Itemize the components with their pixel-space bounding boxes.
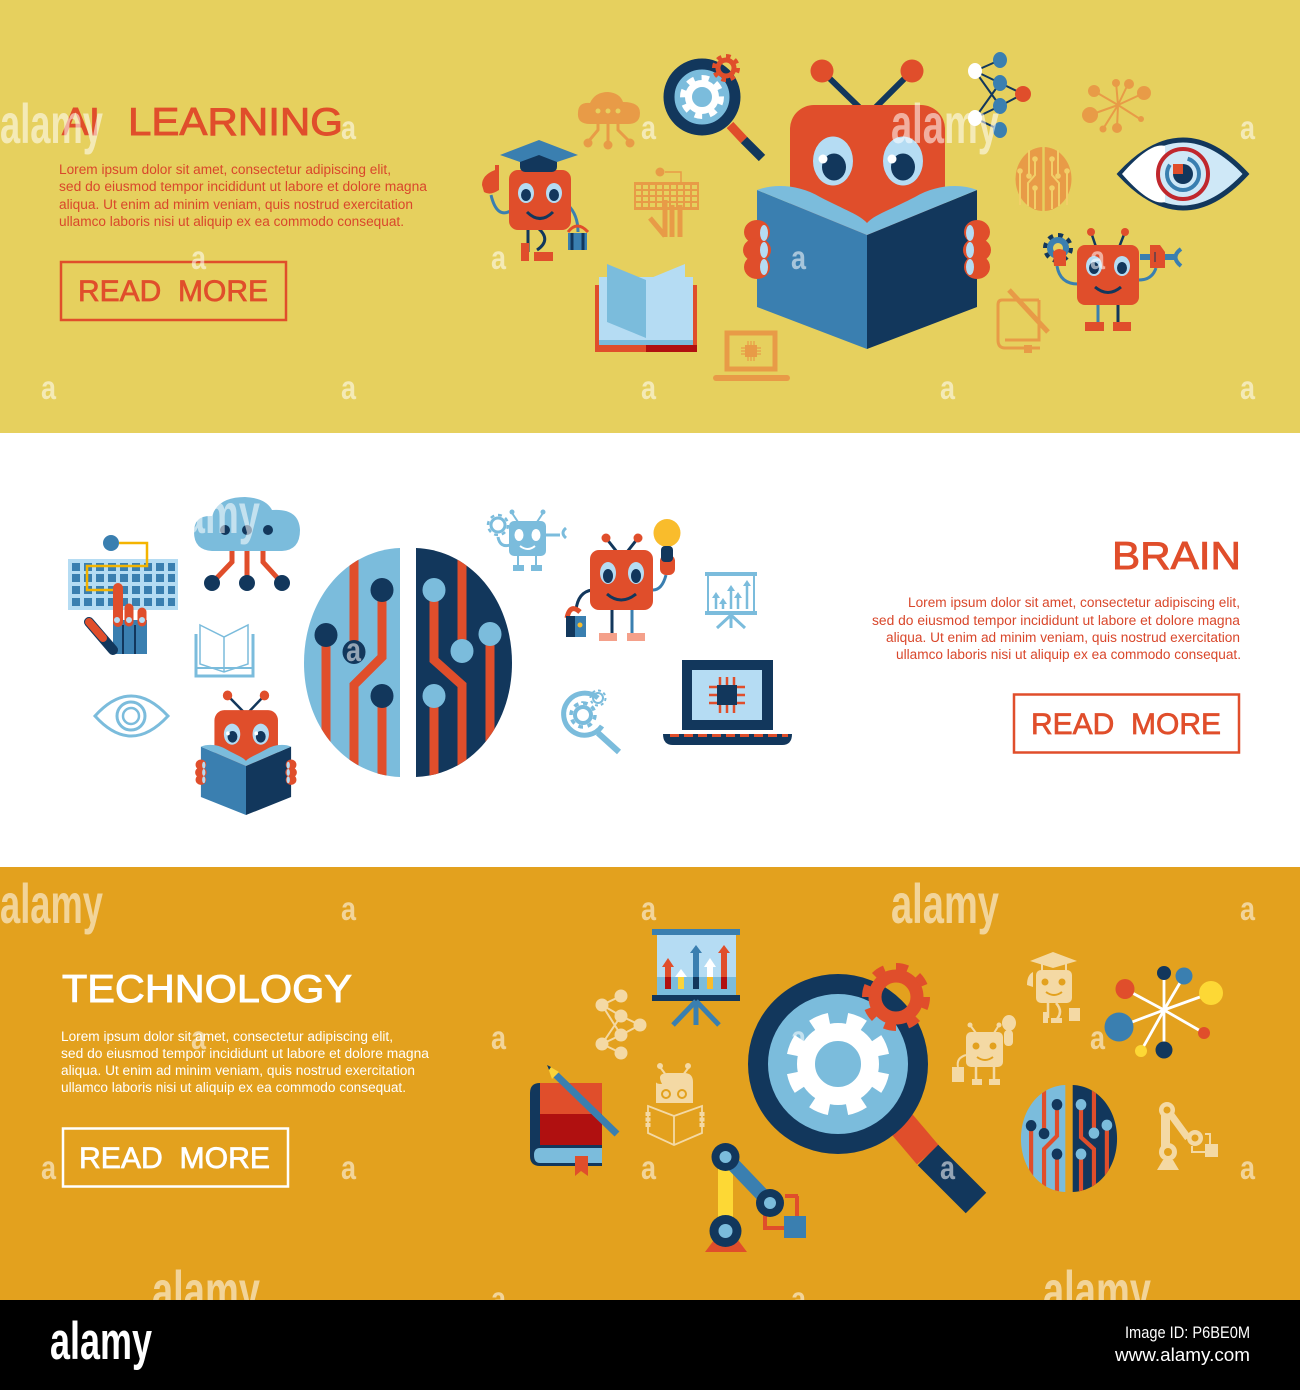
watermarks: a bbox=[940, 1149, 956, 1186]
watermarks: a bbox=[791, 1019, 807, 1056]
watermarks: a bbox=[41, 369, 57, 406]
icon: reading robot bbox=[743, 60, 991, 349]
watermarks: alamy bbox=[0, 872, 103, 935]
text block: AI learning description: ullamco laboris nisi ut aliquip ex ea commodo consequat. bbox=[59, 214, 404, 229]
watermarks: a bbox=[791, 1280, 807, 1317]
text block: technology description: Lorem ipsum dolor sit amet, consectetur adipiscing elit, bbox=[61, 1029, 393, 1044]
text block: technology description bbox=[61, 1029, 429, 1095]
icon: eye outline bbox=[95, 696, 168, 736]
text block: AI learning description: Lorem ipsum dolor sit amet, consectetur adipiscing elit, bbox=[59, 162, 391, 177]
button: read more bbox=[1014, 694, 1239, 752]
watermarks: a bbox=[191, 239, 207, 276]
text block: technology description: sed do eiusmod tempor incididunt ut labore et dolore magna bbox=[61, 1046, 429, 1061]
icon: big magnifier with gear bbox=[758, 967, 976, 1203]
text block: technology description: aliqua. Ut enim ad minim veniam, quis nostrud exercitation bbox=[61, 1063, 415, 1078]
text block: brain description: Lorem ipsum dolor sit amet, consectetur adipiscing elit, bbox=[908, 595, 1240, 610]
text block: brain description: aliqua. Ut enim ad minim veniam, quis nostrud exercitation bbox=[886, 630, 1240, 645]
icon: magnifier outline bbox=[564, 690, 619, 752]
watermarks: a bbox=[1240, 109, 1256, 146]
watermarks: a bbox=[641, 369, 657, 406]
icon: faded cloud bbox=[578, 92, 640, 150]
icon: faded robot arm bbox=[1157, 1102, 1218, 1170]
chart: presentation board bbox=[652, 929, 740, 1025]
icon: cloud network bbox=[194, 497, 300, 591]
watermarks: alamy bbox=[1043, 1259, 1151, 1322]
footer url: www.alamy.com bbox=[1114, 1345, 1250, 1365]
icon: eye bbox=[1120, 140, 1246, 208]
watermarks: alamy bbox=[152, 1259, 260, 1322]
heading: Technology: TECHNOLOGY bbox=[62, 968, 352, 1011]
icon: robot with light bulb bbox=[566, 519, 680, 641]
watermarks: alamy bbox=[152, 482, 260, 545]
footer bar bbox=[0, 1300, 1300, 1390]
watermarks: a bbox=[41, 1149, 57, 1186]
watermarks: alamy bbox=[891, 92, 999, 155]
icon: faded graduate robot bbox=[1027, 952, 1080, 1023]
button: read more bbox=[63, 1128, 288, 1186]
icon: faded laptop bbox=[713, 333, 790, 381]
icon: graduate robot bbox=[482, 140, 588, 261]
icon: mechanic robot bbox=[1045, 228, 1181, 331]
watermarks: a bbox=[1240, 369, 1256, 406]
watermarks: a bbox=[346, 631, 362, 668]
text block: technology description: ullamco laboris nisi ut aliquip ex ea commodo consequat. bbox=[61, 1080, 406, 1095]
watermarks: a bbox=[791, 239, 807, 276]
watermarks: a bbox=[491, 1280, 507, 1317]
watermarks: alamy bbox=[891, 872, 999, 935]
text block: brain description: sed do eiusmod tempor incididunt ut labore et dolore magna bbox=[872, 613, 1240, 628]
button: read more bbox=[61, 262, 286, 320]
icon: robot arm bbox=[705, 1143, 806, 1252]
icon: open book bbox=[595, 264, 697, 352]
panel: brain bbox=[0, 433, 1300, 867]
watermarks: a bbox=[1240, 1149, 1256, 1186]
text block: brain description: ullamco laboris nisi ut aliquip ex ea commodo consequat. bbox=[896, 647, 1241, 662]
watermarks: a bbox=[1240, 890, 1256, 927]
footer image id: Image ID: P6BE0M bbox=[1125, 1324, 1250, 1342]
icon: keyboard and hand bbox=[68, 535, 178, 654]
icon: magnifier with gear bbox=[669, 56, 762, 158]
icon: faded notebook bbox=[998, 290, 1048, 353]
watermarks: a bbox=[341, 369, 357, 406]
button: read more: READ MORE bbox=[79, 1142, 270, 1175]
watermarks: a bbox=[491, 1019, 507, 1056]
watermarks: a bbox=[641, 890, 657, 927]
footer logo: alamy bbox=[50, 1312, 152, 1371]
icon: faded bulb robot bbox=[952, 1015, 1016, 1085]
icon: faded brain bbox=[1016, 146, 1072, 212]
icon: faded keyboard and hand bbox=[634, 168, 699, 237]
icon: faded reading robot bbox=[648, 1064, 702, 1145]
heading: AI Learning: LEARNING bbox=[128, 101, 343, 144]
icon: neural network bbox=[968, 52, 1031, 138]
icon: faded network star bbox=[1082, 79, 1151, 133]
panel: technology bbox=[0, 867, 1300, 1300]
text block: AI learning description bbox=[59, 162, 427, 229]
heading: AI Learning: AI bbox=[62, 101, 100, 144]
icon: open book outline bbox=[196, 625, 253, 676]
watermarks: a bbox=[341, 890, 357, 927]
icon: light blue mechanic robot bbox=[488, 510, 566, 571]
icon: reading robot small bbox=[195, 691, 297, 815]
watermarks: a bbox=[1090, 239, 1106, 276]
icon: book with pencil bbox=[530, 1065, 617, 1176]
watermarks: a bbox=[191, 1019, 207, 1056]
text block: brain description bbox=[872, 595, 1241, 662]
watermarks: a bbox=[341, 109, 357, 146]
watermarks: a bbox=[641, 1149, 657, 1186]
text block: AI learning description: aliqua. Ut enim ad minim veniam, quis nostrud exercitation bbox=[59, 197, 413, 212]
icon: laptop with chip bbox=[663, 660, 792, 745]
heading: Brain: BRAIN bbox=[1112, 535, 1241, 578]
icon: faded network bbox=[596, 990, 646, 1060]
watermarks: a bbox=[1090, 1019, 1106, 1056]
button: read more: READ MORE bbox=[78, 275, 268, 308]
watermarks: alamy bbox=[0, 92, 103, 155]
button: read more: READ MORE bbox=[1031, 708, 1221, 741]
watermarks: a bbox=[491, 239, 507, 276]
panel: AI learning bbox=[0, 0, 1300, 433]
watermarks: a bbox=[641, 109, 657, 146]
watermarks: a bbox=[940, 369, 956, 406]
watermarks: a bbox=[341, 1149, 357, 1186]
chart: presentation board outline bbox=[705, 574, 757, 628]
chart: circuit brain bbox=[304, 548, 512, 780]
icon: small circuit brain bbox=[1021, 1085, 1117, 1193]
icon: colored network star bbox=[1104, 966, 1223, 1058]
text block: AI learning description: sed do eiusmod tempor incididunt ut labore et dolore magna bbox=[59, 179, 427, 194]
